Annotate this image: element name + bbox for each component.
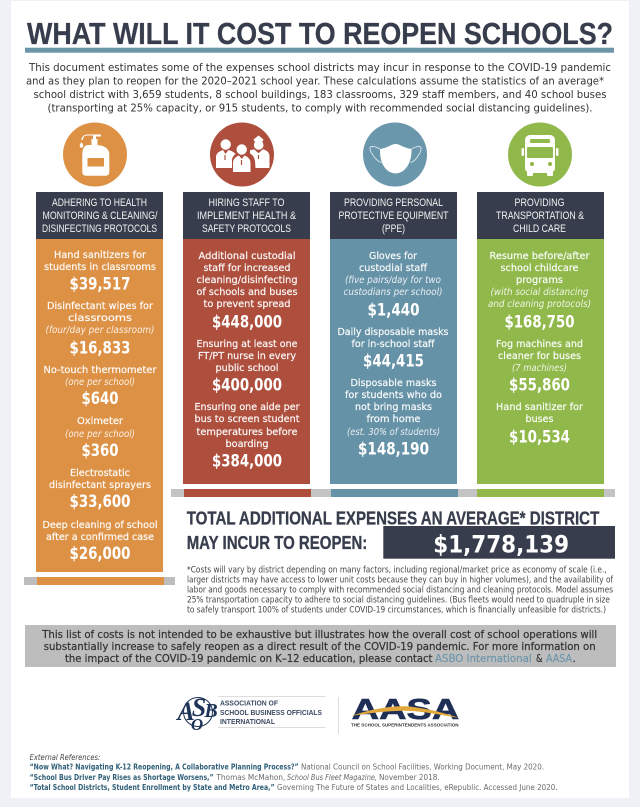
ASBO emblem: B [203,700,218,722]
panel: personal protective equipment [330,192,457,484]
cost list: hiring staff items: FT/PT nurse in every [198,351,296,362]
cost list: health monitoring items: students in classrooms [44,262,156,273]
cost list: ppe items: from home [366,414,421,425]
icon: staff [210,122,274,186]
footer band: three columns [171,489,615,497]
cost list: transportation items: Resume before/after [490,251,590,262]
ASBO emblem [175,693,218,734]
cost list: ppe items: custodial staff [359,263,427,274]
references: Governing The Future of States and Localities, eRepublic. Accessed June 2020. [277,783,558,792]
total amount: $1,778,139 [433,531,569,559]
header: transportation [477,192,604,239]
cost list: health monitoring items: $39,517 [70,274,130,293]
references: External References: [30,753,100,762]
panel: health monitoring and cleaning [36,192,163,572]
header: ppe [330,192,457,239]
footer band: orange column [24,577,175,585]
logo: ASBO International [175,693,325,734]
callout: disclaimer [25,625,616,667]
icon: hand sanitizer [63,122,127,186]
cost list: health monitoring items: Oximeter [77,416,123,427]
cost list: ppe items: for students who do [345,390,442,401]
references: National Council on School Facilities, Working Document, May 2020. [301,763,544,772]
cost list: health monitoring items: $640 [82,389,118,408]
cost list: transportation items: (7 machines) [512,363,567,374]
header: transportation: PROVIDING [514,197,564,209]
cost list: hiring staff items: boarding [226,439,268,450]
cost list: health monitoring items: disinfectant sprayers [49,480,151,491]
header: ppe: PROVIDING PERSONAL [344,197,443,209]
icon: school bus [508,122,572,186]
header: hiring staff: HIRING STAFF TO [208,197,285,209]
cost list: hiring staff items: Ensuring at least one [196,339,298,350]
panel: transportation and child care [477,192,604,484]
cost list: hiring staff items: $448,000 [212,312,282,331]
cost list: hiring staff items: to prevent spread [204,299,290,310]
cost list: health monitoring items: $33,600 [70,492,130,511]
cost list: health monitoring items: (one per school) [65,377,135,388]
panel: hiring staff [183,192,310,484]
cost list: ppe items: (est. 30% of students) [347,427,440,438]
intro text block [26,62,611,114]
ASBO emblem: O [191,715,203,734]
cost list: health monitoring items: (four/day per classroom) [46,325,154,336]
cost list: ppe items: $148,190 [358,439,429,458]
references: “Total School Districts, Student Enrollment by State and Metro Area,” [30,783,275,792]
header: transportation: TRANSPORTATION & [496,210,585,222]
cost list: transportation items: buses [526,414,554,425]
cost list: ppe items: (five pairs/day for two [345,275,441,286]
ASBO emblem: A [175,697,195,726]
callout: disclaimer: & [536,654,543,665]
logo: AASA: AASA [352,694,459,726]
header: ppe: (PPE) [382,223,405,235]
cost list: health monitoring items: after a confirmed case [46,532,154,543]
cost list: ppe items: custodians per school) [344,287,442,298]
header: adhering to health [36,192,163,239]
ASBO wordmark: ASSOCIATION OF [220,698,278,708]
references: “Now What? Navigating K-12 Reopening, A Collaborative Planning Process?” [30,763,299,772]
header: hiring staff: SAFETY PROTOCOLS [202,223,291,235]
header: hiring staff [183,192,310,239]
cost list: transportation items: (with social distancing [490,287,588,298]
cost list: hiring staff items: cleaning/disinfecting [196,275,298,286]
references: School Bus Fleet Magazine, [287,773,377,782]
total heading [187,507,600,553]
footnote [187,565,614,615]
cost list: health monitoring items: Electrostatic [70,468,130,479]
header: adhering to health: ADHERING TO HEALTH [52,197,147,209]
header: adhering to health: DISINFECTING PROTOCOLS [42,223,157,235]
cost list: transportation items: school childcare [500,263,579,274]
references [30,753,558,792]
logo: AASA: THE SCHOOL SUPERINTENDENTS ASSOCIATION [351,722,458,728]
callout: disclaimer: . [572,654,576,665]
icon: face mask [363,122,427,186]
cost list: transportation items: and cleaning protocols) [488,299,591,310]
cost list: transportation items [488,251,591,447]
cost list: ppe items: not bring masks [355,402,432,413]
cost list: health monitoring items: No-touch thermometer [44,365,157,376]
cost list: health monitoring items: $26,000 [70,544,130,563]
cost list: hiring staff items: $400,000 [212,375,282,394]
ASBO wordmark: INTERNATIONAL [220,717,275,726]
cost list: hiring staff items: temperatures before [196,427,298,438]
cost list: transportation items: Fog machines and [496,339,583,350]
cost list: hiring staff items [194,251,300,470]
cost list: transportation items: $168,750 [504,312,574,331]
cost list: hiring staff items: staff for increased [204,263,290,274]
cost list: hiring staff items: bus to screen student [194,414,300,425]
cost list: health monitoring items: Deep cleaning of school [42,520,158,531]
cost list: health monitoring items: Hand sanitizers for [54,250,146,261]
cost list: ppe items [338,251,448,458]
callout: disclaimer: This list of costs is not intended to be exhaustive but illustrates how the overall cost of school operations will [41,630,597,641]
cost list: health monitoring items: $360 [82,441,118,460]
header: hiring staff: IMPLEMENT HEALTH & [197,210,297,222]
intro text block: and as they plan to reopen for the 2020–2021 school year. These calculations assume the statistics of an average* [26,76,604,88]
cost list: hiring staff items: public school [216,363,278,374]
cost list: health monitoring items: classrooms [68,313,132,324]
references: November 2018. [379,773,440,782]
cost list: ppe items: Daily disposable masks [338,327,448,338]
ASBO wordmark [218,696,325,728]
cost list: hiring staff items: $384,000 [212,451,282,470]
cost list: health monitoring items: (one per school) [65,429,135,440]
cost list: transportation items: Hand sanitizer for [496,402,583,413]
cost list: ppe items: Disposable masks [350,378,436,389]
references: Thomas McMahon, [215,773,285,782]
callout: disclaimer: the impact of the COVID-19 pandemic on K–12 education, please contact [65,654,432,665]
total amount [383,526,615,559]
header: ppe: PROTECTIVE EQUIPMENT [338,210,449,222]
intro text block: (transporting at 25% capacity, or 915 students, to comply with recommended social distancing guidelines). [48,102,592,114]
references: “School Bus Driver Pay Rises as Shortage Worsens,” [30,773,214,782]
header: transportation: CHILD CARE [513,223,566,235]
cost list: hiring staff items: of schools and buses [196,287,298,298]
callout: disclaimer: ASBO International [435,654,532,665]
total heading: MAY INCUR TO REOPEN: [187,532,367,553]
cost list: transportation items: programs [516,275,563,286]
cost list: hiring staff items: Additional custodial [198,251,296,262]
callout: disclaimer: AASA [546,654,572,665]
cost list: hiring staff items: Ensuring one aide per [194,402,300,413]
cost list: transportation items: cleaner for buses [498,351,581,362]
cost list: transportation items: $55,860 [509,375,570,394]
cost list: health monitoring items: $16,833 [70,338,130,357]
callout: disclaimer: substantially increase to safely reopen as a direct result of the COVID-19 pandemic. For more information on [44,642,596,653]
cost list: ppe items: $44,415 [363,351,424,370]
cost list: health monitoring items: Disinfectant wipes for [47,301,153,312]
cost list: ppe items: Gloves for [369,251,417,262]
intro text block: school district with 3,659 students, 8 school buildings, 183 classrooms, 329 staff members, and 40 school buses [34,89,606,101]
ASBO wordmark: SCHOOL BUSINESS OFFICIALS [220,708,322,717]
cost list: ppe items: for in-school staff [352,339,435,350]
intro text block: This document estimates some of the expenses school districts may incur in response to the COVID-19 pandemic [28,62,611,74]
header: adhering to health: MONITORING & CLEANING/ [42,210,158,222]
cost list: transportation items: $10,534 [509,428,570,447]
cost list: ppe items: $1,440 [368,300,420,319]
cost list: health monitoring items [42,250,158,563]
ASBO emblem: S [192,693,206,722]
